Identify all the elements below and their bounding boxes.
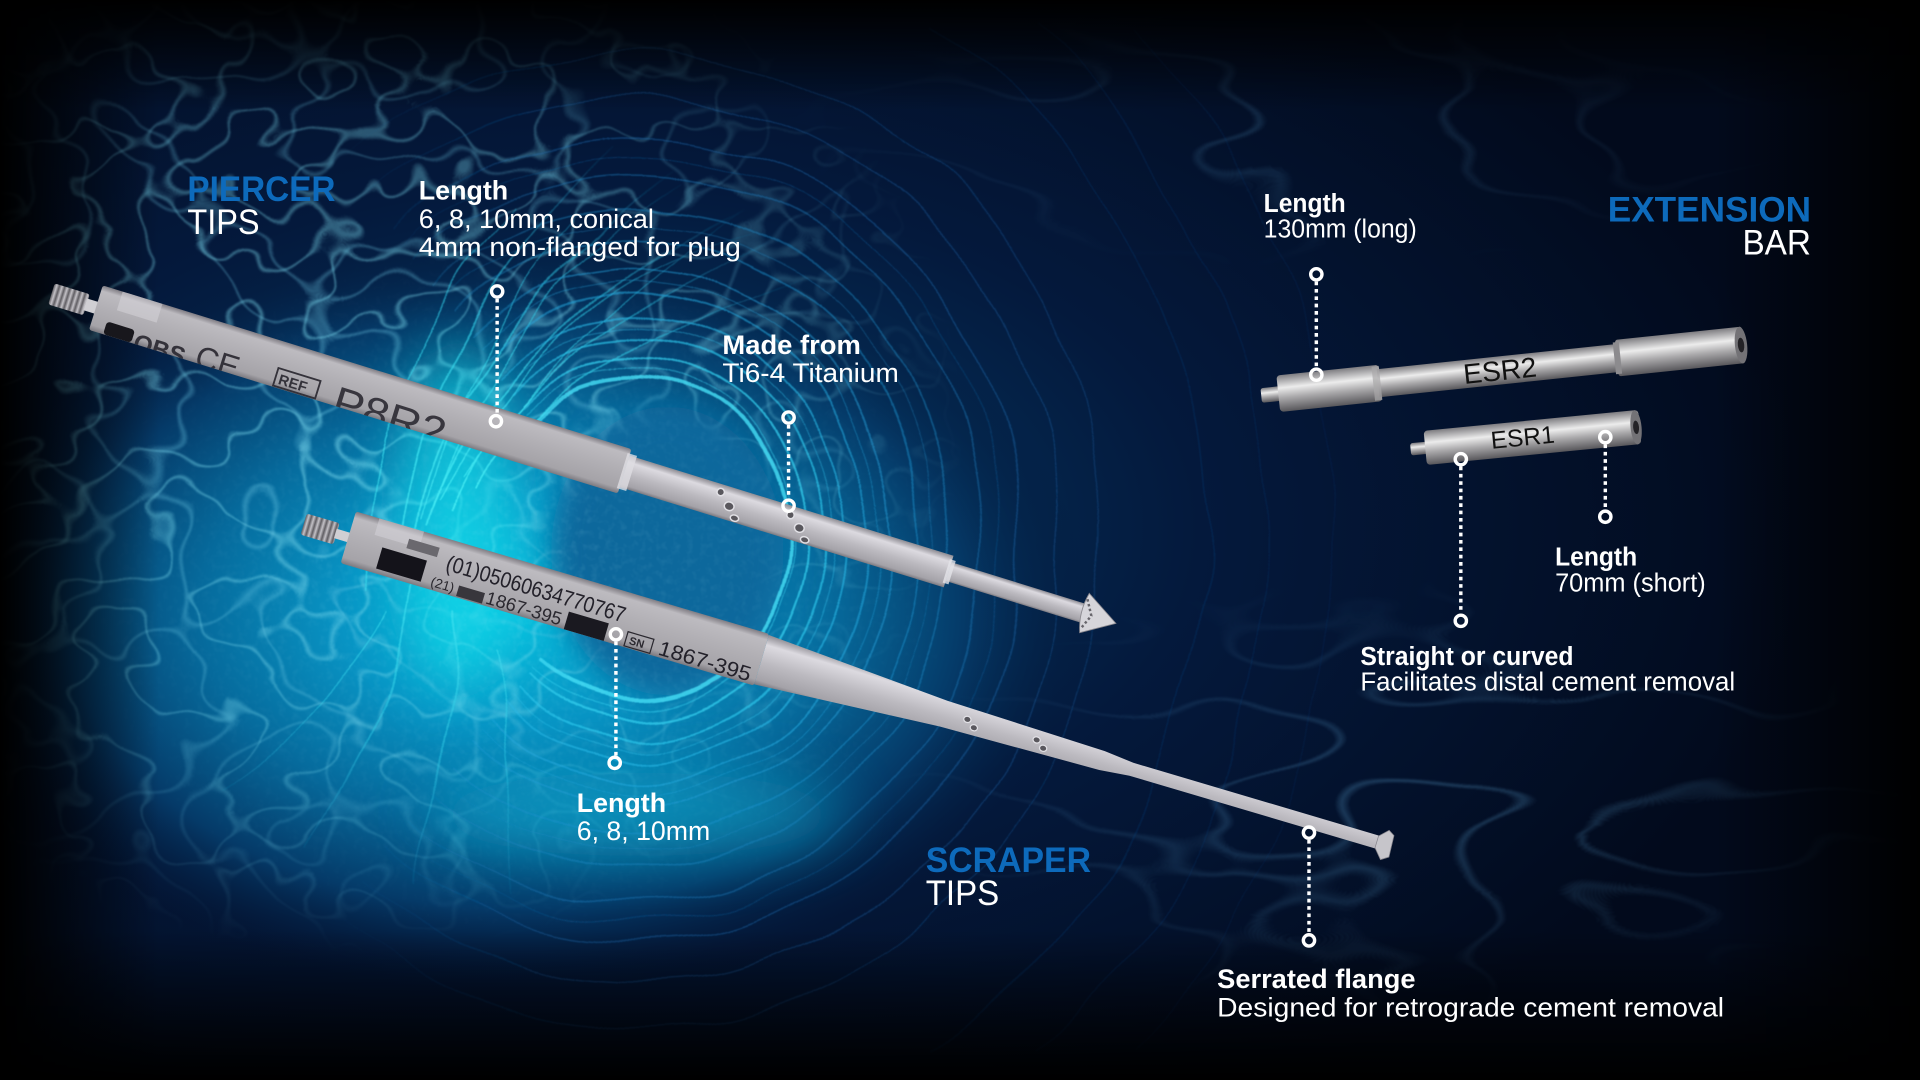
heading: extension bar: BAR	[1742, 223, 1811, 263]
bar end bore	[1733, 326, 1749, 364]
heading: extension bar: EXTENSION	[1608, 190, 1811, 230]
shaft laser markings: (01)05060634770767	[443, 551, 629, 627]
callout: short bar length	[1555, 432, 1706, 597]
thin section	[946, 562, 1090, 624]
shaft engravings	[104, 322, 445, 436]
threaded end	[48, 283, 90, 315]
instrument: piercer tip	[48, 284, 1116, 634]
bar label: ESR2	[1462, 351, 1538, 390]
side holes	[961, 715, 1049, 752]
serrated flange	[1372, 828, 1396, 862]
shaft engravings: OBS	[130, 329, 189, 371]
tapered shaft	[754, 635, 1385, 867]
callout: straight or curved: Facilitates distal cement removal	[1360, 669, 1735, 697]
heading: extension bar	[1608, 190, 1811, 263]
shaft	[341, 511, 769, 686]
conical tip	[1075, 593, 1122, 642]
callout: piercer length: Length	[419, 176, 508, 206]
threaded end	[301, 514, 340, 544]
heading: scraper tips: TIPS	[926, 873, 999, 913]
callout: straight or curved: Straight or curved	[1360, 643, 1573, 671]
shaft laser markings: 1867-395	[483, 587, 565, 629]
middle section	[620, 456, 953, 587]
callout: piercer length: 4mm non-flanged for plug	[419, 232, 741, 262]
shaft engravings: CE	[191, 338, 244, 386]
callout: scraper length: 6, 8, 10mm	[577, 816, 710, 846]
instrument: scraper tip	[295, 498, 1400, 875]
callout: short bar length: 70mm (short)	[1555, 569, 1706, 597]
heading: piercer tips: PIERCER	[187, 169, 336, 209]
bar end bore	[1629, 410, 1643, 445]
callout: titanium material	[722, 330, 899, 511]
callout: piercer length: 6, 8, 10mm, conical	[419, 204, 654, 234]
main shaft	[89, 285, 631, 494]
callout: serrated flange: Serrated flange	[1217, 964, 1416, 994]
instrument: extension bar ESR2	[1259, 326, 1749, 414]
heading: scraper tips: SCRAPER	[926, 840, 1091, 880]
shaft engravings: P8R2	[327, 377, 452, 456]
callout: titanium material: Made from	[722, 330, 861, 360]
callout: scraper length: Length	[577, 788, 666, 818]
shaft laser markings: (21)	[429, 574, 456, 595]
shaft engravings: REF	[276, 372, 309, 396]
shaft laser markings: 1867-395	[656, 637, 754, 686]
callout: long bar length: Length	[1264, 190, 1346, 218]
shaft laser markings: SN	[627, 635, 646, 651]
side holes	[710, 487, 816, 544]
heading: scraper tips	[926, 840, 1091, 913]
callout: serrated flange: Designed for retrograde cement removal	[1217, 992, 1724, 1022]
callout: titanium material: Ti6-4 Titanium	[722, 358, 899, 388]
instrument: extension bar ESR1	[1409, 410, 1643, 466]
heading: piercer tips: TIPS	[187, 202, 260, 242]
callout: long bar length	[1264, 190, 1417, 380]
callout: long bar length: 130mm (long)	[1264, 216, 1417, 244]
callout: scraper length	[577, 629, 710, 846]
bar label: ESR1	[1490, 422, 1556, 455]
callout: short bar length: Length	[1555, 544, 1637, 572]
callout: piercer length	[419, 176, 741, 427]
heading: piercer tips	[187, 169, 336, 242]
callout: straight or curved	[1360, 454, 1735, 697]
shaft laser markings	[376, 538, 751, 680]
callout: serrated flange	[1217, 827, 1724, 1022]
